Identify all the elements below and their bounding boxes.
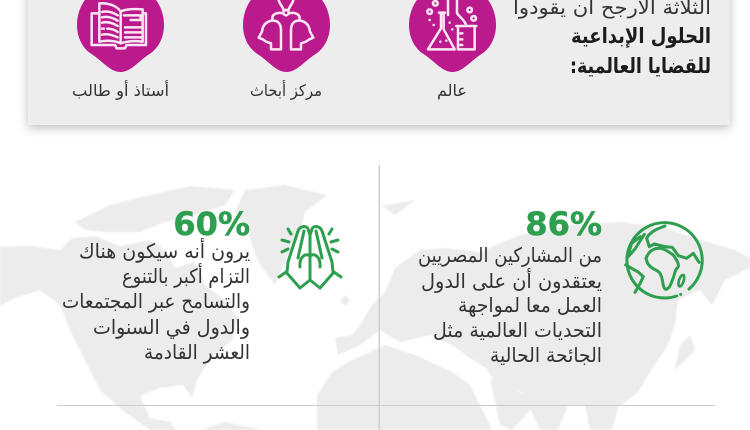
icon: teacher or student book badge [77,0,164,72]
value: 86%: 86% [525,205,602,243]
icon: research centre heads badge [243,0,330,72]
icon: praying hands [279,227,341,288]
icon: scientist flask badge [409,0,496,72]
text: 60 percent description: التزام أكبر بالتنوع [122,263,250,288]
text: 86 percent description: يعتقدون أن على الدول [421,268,602,293]
stat: 86 percent [418,205,702,367]
heading: panel question: الحلول الإبداعية [571,24,711,48]
label: teacher or student: أستاذ أو طالب [72,80,169,101]
text: 60 percent description [62,238,250,364]
text: 60 percent description: والتسامح عبر المجتمعات [62,289,250,313]
label: scientist: عالم [437,81,467,100]
heading: panel question: للقضايا العالمية: [570,54,711,78]
stat: 60 percent [62,205,341,364]
panel: three groups [28,0,730,125]
icon: globe [626,223,702,298]
text: 86 percent description: التحديات العالمية مثل [433,318,602,342]
text: 60 percent description: والدول في السنوات [93,315,250,340]
text: 60 percent description: العشر القادمة [144,340,250,364]
text: 86 percent description: الجائحة الحالية [490,343,602,367]
text: 86 percent description [418,243,602,367]
divider lines [57,165,715,430]
world map background [0,185,750,430]
text: 86 percent description: العمل معا لمواجهة [458,293,602,317]
heading: panel question [513,0,711,78]
label: research centre: مركز أبحاث [250,80,322,101]
value: 60%: 60% [173,205,250,243]
text: 60 percent description: يرون أنه سيكون هناك [79,238,250,263]
text: 86 percent description: من المشاركين المصريين [418,243,602,267]
